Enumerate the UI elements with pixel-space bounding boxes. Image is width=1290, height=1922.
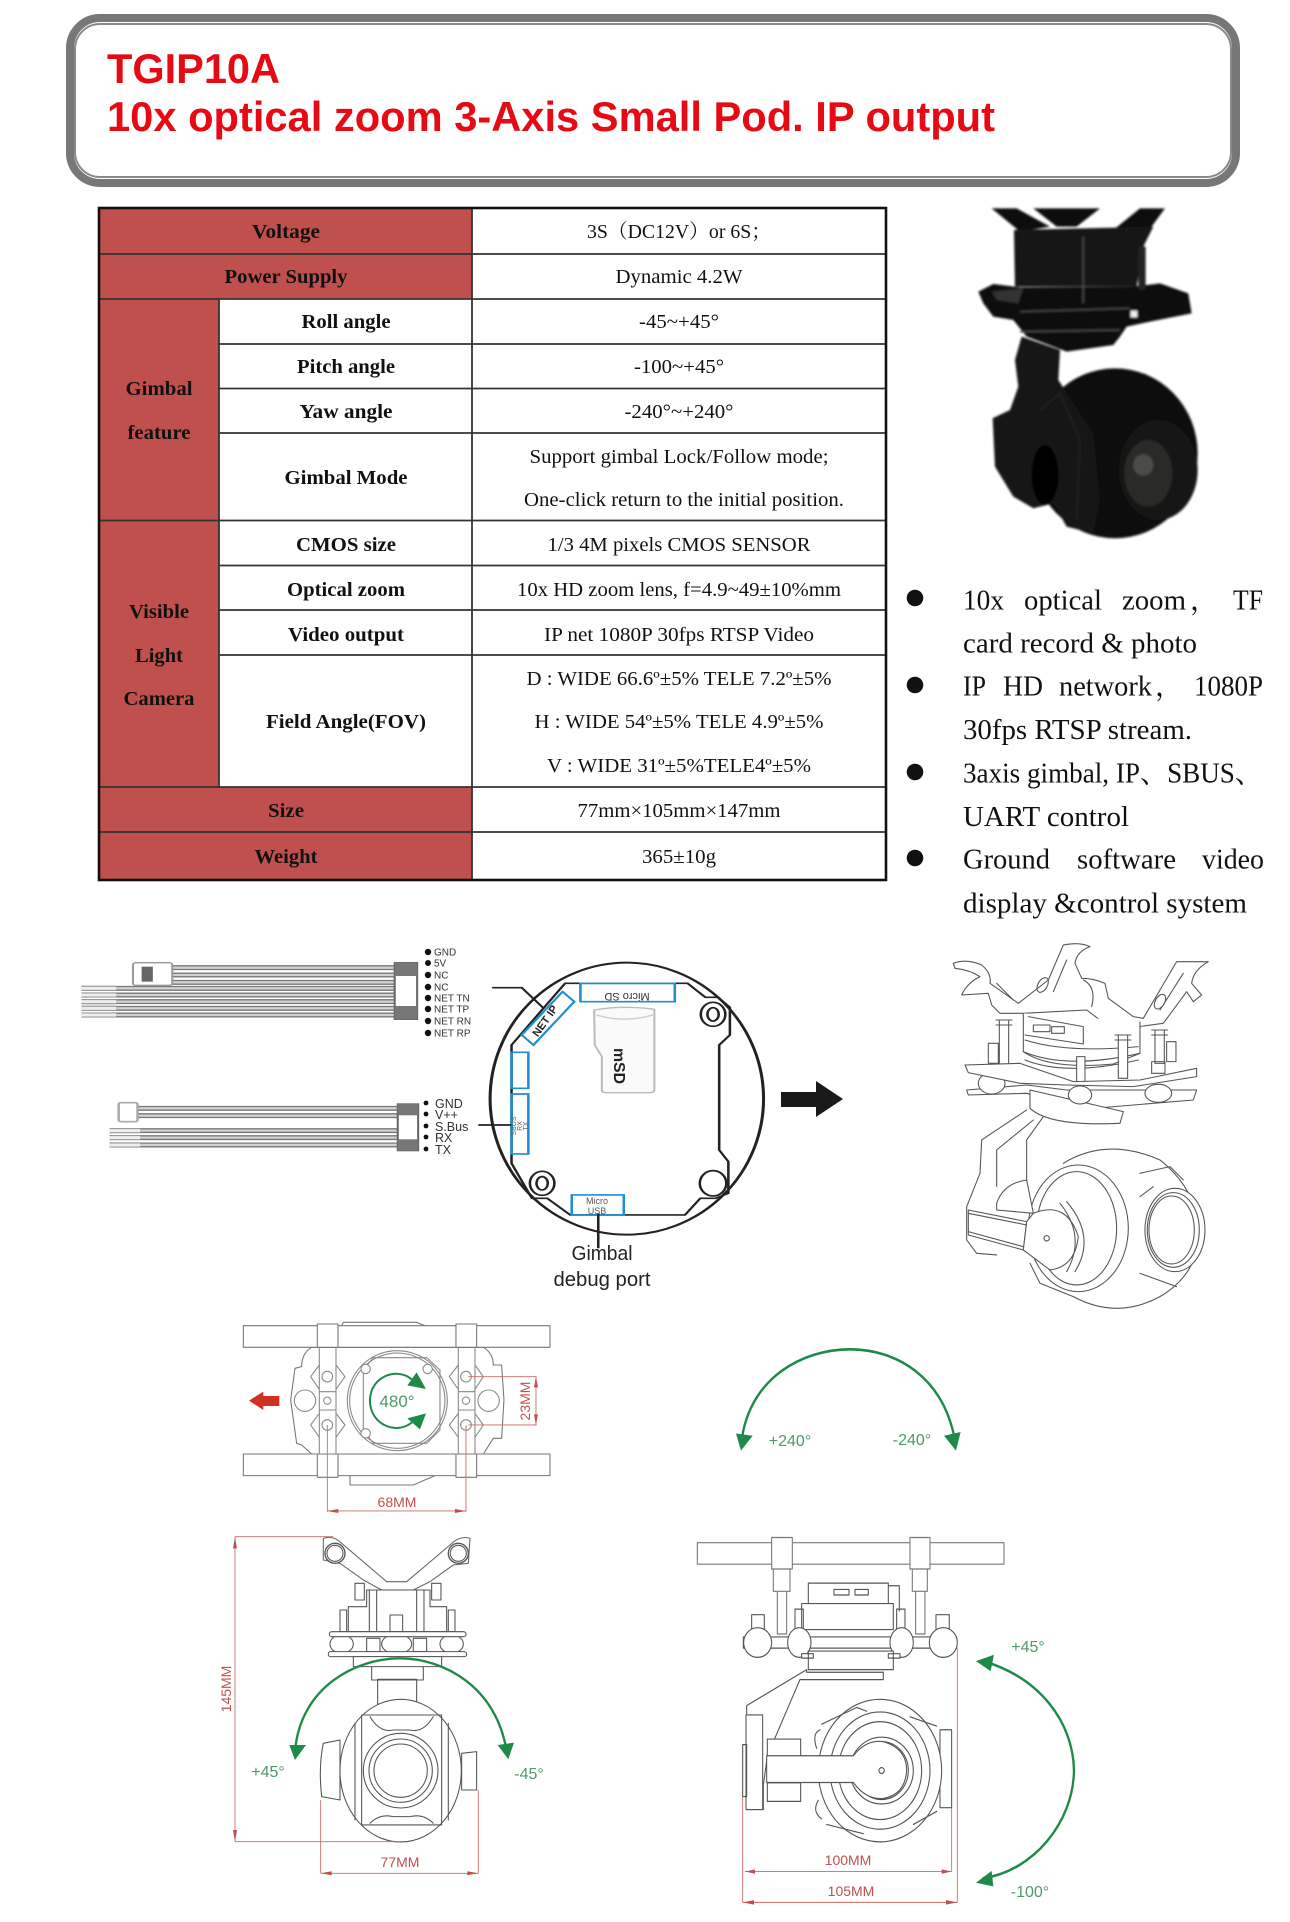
row: CMOS size: 1/3 4M pixels CMOS SENSOR bbox=[548, 534, 811, 556]
row: Field Angle: V : WIDE 31º±5%TELE4º±5% bbox=[547, 755, 811, 777]
front view dimension drawing bbox=[218, 1537, 544, 1875]
row: Weight: 365±10g bbox=[642, 846, 716, 868]
row: Optical zoom: Optical zoom bbox=[287, 579, 405, 601]
circuit board port diagram bbox=[478, 963, 764, 1291]
row: Power Supply: Dynamic 4.2W bbox=[616, 266, 743, 288]
pin labels: network bbox=[425, 948, 471, 1040]
group label: Gimbal feature bbox=[126, 378, 193, 444]
gimbal line drawing bbox=[953, 944, 1208, 1308]
row: Gimbal Mode: Support gimbal Lock/Follow mode; bbox=[530, 446, 828, 468]
row: Size: 77mm×105mm×147mm bbox=[578, 800, 781, 822]
pin labels: network: NC bbox=[434, 970, 448, 982]
bullet 1: optical bbox=[1024, 586, 1102, 616]
caption: Gimbal debug port: debug port bbox=[554, 1269, 651, 1291]
group label: Visible Light Camera: Visible bbox=[129, 601, 189, 623]
roll label: -45: -45° bbox=[514, 1766, 544, 1783]
bullet 3 bbox=[907, 759, 1262, 833]
pin labels: network: NC bbox=[434, 982, 448, 994]
port label: Micro USB: Micro bbox=[586, 1196, 608, 1206]
row: Power Supply: Power Supply bbox=[224, 266, 348, 288]
pin labels: network: NET TN bbox=[434, 994, 470, 1004]
bullet 4: Ground bbox=[963, 845, 1050, 876]
port label: Micro USB: USB bbox=[588, 1206, 606, 1216]
row: Optical zoom: 10x HD zoom lens, f=4.9~49±10%mm bbox=[517, 579, 841, 601]
row: Size bbox=[268, 800, 781, 822]
bullet 4 bbox=[907, 845, 1264, 919]
port label: S.Bus bbox=[511, 1116, 530, 1136]
row: Yaw angle bbox=[300, 401, 734, 423]
group label: Visible Light Camera: Light bbox=[135, 645, 183, 667]
yaw range arc bbox=[736, 1349, 961, 1451]
top view dimension drawing bbox=[243, 1322, 550, 1513]
pin labels: network: GND bbox=[434, 948, 456, 958]
bullet 4: video bbox=[1202, 845, 1264, 876]
bullet 2: 30fps RTSP stream. bbox=[963, 715, 1192, 746]
row: Weight bbox=[254, 846, 716, 868]
bullet 2: network bbox=[1059, 672, 1152, 703]
dimension label: 68MM: 68MM bbox=[378, 1494, 416, 1510]
caption: Gimbal debug port: Gimbal bbox=[572, 1243, 632, 1265]
title: model name: TGIP10A bbox=[107, 45, 280, 92]
pin labels: control bbox=[424, 1097, 468, 1157]
pin labels: network: 5V bbox=[434, 958, 447, 970]
row: Video output bbox=[288, 624, 814, 646]
bullet 1: zoom bbox=[1122, 586, 1186, 616]
pin labels: control: TX bbox=[435, 1143, 452, 1157]
port label: S.Bus: RX bbox=[517, 1121, 524, 1131]
arrow: board to assembly bbox=[781, 1081, 843, 1117]
pin labels: network: NET RP bbox=[434, 1028, 471, 1040]
pitch label: +45: +45° bbox=[1011, 1639, 1045, 1656]
group label: Gimbal feature: Gimbal bbox=[126, 378, 193, 400]
network cable with pinout bbox=[81, 948, 471, 1040]
row: Voltage: 3S（DC12V）or 6S； bbox=[587, 221, 771, 243]
row: Power Supply bbox=[224, 266, 743, 288]
bullet 2: ， bbox=[1155, 672, 1183, 703]
port label: S.Bus: TX bbox=[523, 1121, 530, 1130]
row: Optical zoom bbox=[287, 579, 841, 601]
pitch label: -100: -100° bbox=[1011, 1884, 1049, 1901]
bullet 1: TF bbox=[1233, 586, 1263, 616]
roll label: +45: +45° bbox=[251, 1764, 285, 1781]
specification table bbox=[99, 208, 886, 880]
control cable with pinout bbox=[109, 1097, 468, 1157]
group label: Visible Light Camera: Camera bbox=[124, 688, 194, 710]
bullet 3: 3axis gimbal, IP、SBUS、 bbox=[963, 759, 1262, 790]
row: Voltage bbox=[252, 221, 771, 243]
dimension label: 100MM: 100MM bbox=[825, 1852, 871, 1868]
side view dimension drawing bbox=[697, 1537, 1074, 1905]
bullet 2: HD bbox=[1003, 672, 1043, 703]
pin labels: control: RX bbox=[435, 1131, 453, 1145]
row: Yaw angle: -240°~+240° bbox=[624, 401, 734, 423]
row: Voltage: Voltage bbox=[252, 221, 320, 243]
bullet 1: card record & photo bbox=[963, 629, 1197, 660]
caption: Gimbal debug port bbox=[554, 1243, 651, 1291]
product photo bbox=[978, 208, 1198, 538]
title: product description: 10x optical zoom 3-Axis Small Pod. IP output bbox=[107, 93, 995, 140]
pin labels: network: NET TP bbox=[434, 1004, 470, 1016]
title panel bbox=[70, 18, 1236, 183]
bullet 2 bbox=[907, 672, 1263, 746]
row: Roll angle: -45~+45° bbox=[639, 311, 719, 333]
port label: S.Bus: SBUS bbox=[511, 1116, 518, 1136]
row: Field Angle: D : WIDE 66.6º±5% TELE 7.2º±5% bbox=[526, 668, 832, 690]
row: Pitch angle: Pitch angle bbox=[297, 356, 395, 378]
row: Pitch angle bbox=[297, 356, 724, 378]
row: Video output: Video output bbox=[288, 624, 404, 646]
row: Video output: IP net 1080P 30fps RTSP Video bbox=[544, 624, 814, 646]
pin labels: network: NET RN bbox=[434, 1016, 471, 1028]
dimension label: 77MM: 77MM bbox=[381, 1854, 419, 1870]
row: Gimbal Mode: One-click return to the initial position. bbox=[524, 489, 844, 511]
port label: Micro SD: Micro SD bbox=[604, 990, 650, 1002]
port label: NET IP: NET IP bbox=[530, 1003, 561, 1039]
bullet 4: software bbox=[1077, 845, 1176, 876]
row: Yaw angle: Yaw angle bbox=[300, 401, 393, 423]
bullet 2: 1080P bbox=[1194, 672, 1263, 703]
row: Gimbal Mode: Gimbal Mode bbox=[284, 467, 408, 489]
row: Field Angle: H : WIDE 54º±5% TELE 4.9º±5% bbox=[534, 711, 824, 733]
group label: Visible Light Camera bbox=[124, 601, 194, 710]
dimension label: 145MM: 145MM bbox=[218, 1666, 234, 1712]
bullet 1: ， bbox=[1190, 586, 1218, 616]
bullet 3: UART control bbox=[963, 802, 1129, 833]
pin labels: control: V++ bbox=[435, 1108, 458, 1122]
row: Size: Size bbox=[268, 800, 304, 822]
pin labels: control: S.Bus bbox=[435, 1120, 468, 1134]
bullet 1: 10x bbox=[963, 586, 1004, 616]
row: Roll angle bbox=[302, 311, 719, 333]
row: Field Angle bbox=[266, 668, 832, 777]
pin labels: control: GND bbox=[435, 1097, 463, 1111]
row: CMOS size bbox=[296, 534, 811, 556]
dimension label: 105MM: 105MM bbox=[828, 1883, 874, 1899]
feature bullet list bbox=[907, 586, 1264, 919]
row: Gimbal Mode bbox=[284, 446, 844, 511]
bullet 4: display &control system bbox=[963, 888, 1247, 919]
row: Pitch angle: -100~+45° bbox=[634, 356, 724, 378]
yaw label: -240: -240° bbox=[893, 1432, 931, 1449]
row: CMOS size: CMOS size bbox=[296, 534, 396, 556]
bullet 1 bbox=[907, 586, 1263, 660]
microSD logo: mSD bbox=[610, 1048, 627, 1084]
yaw label: +240: +240° bbox=[769, 1433, 811, 1450]
row: Roll angle: Roll angle bbox=[302, 311, 391, 333]
bullet 2: IP bbox=[963, 672, 986, 703]
row: Field Angle: Field Angle(FOV) bbox=[266, 711, 426, 733]
dimension label: 23MM: 23MM bbox=[517, 1382, 533, 1420]
group label: Gimbal feature: feature bbox=[128, 422, 191, 444]
row: Weight: Weight bbox=[254, 846, 318, 868]
yaw range label: 480 degrees: 480° bbox=[379, 1392, 415, 1411]
